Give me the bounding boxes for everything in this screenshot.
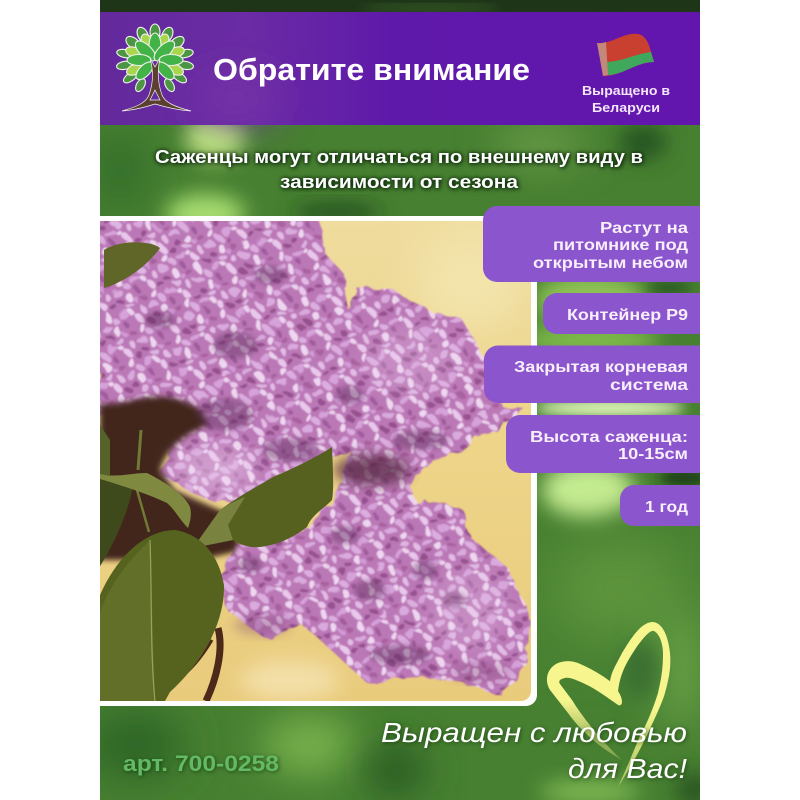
pill: closed roots: [484, 346, 700, 403]
label: grown in Belarus: Беларуси: [592, 100, 660, 115]
notice text: зависимости от сезона: [280, 172, 519, 192]
title: Обратите внимание: [213, 52, 530, 87]
label: grown in Belarus: [582, 83, 670, 115]
label: grown in Belarus: Выращено в: [582, 83, 670, 98]
pill: closed roots: Закрытая корневая: [514, 359, 688, 376]
pill: height: [506, 415, 700, 473]
notice text: Саженцы могут отличаться по внешнему виду в: [155, 147, 643, 167]
leaf: centre pointed: [193, 447, 333, 548]
pill: closed roots: система: [610, 377, 688, 394]
article number: арт. 700-0258: [123, 751, 279, 776]
pill: age: 1 год: [645, 499, 688, 516]
leaf: dark left: [100, 478, 133, 566]
cluster shading: [144, 266, 467, 665]
slogan: [381, 717, 687, 784]
leaf: vertical sliver left: [100, 425, 110, 475]
leaf: small centre-left: [100, 473, 191, 528]
dark centre behind flowers: [100, 397, 245, 560]
pill: height: 10-15см: [618, 446, 688, 463]
slogan: Выращен с любовью: [381, 717, 687, 748]
pill: container: [543, 293, 700, 334]
photo: lilac: [92, 215, 531, 701]
icon: Belarus flag: [597, 34, 654, 76]
pill: open air: питомнике под: [553, 237, 688, 254]
pill: height: Высота саженца:: [530, 429, 688, 446]
header band: [100, 12, 700, 125]
notice text: [155, 147, 643, 192]
stems: [137, 430, 220, 701]
leaf: large bottom: [100, 530, 224, 701]
slogan: для Вас!: [568, 753, 687, 784]
green blurred background: [100, 125, 700, 800]
outer leaves: [116, 24, 194, 93]
trunk and roots: [122, 58, 191, 111]
leaf: top left: [104, 242, 160, 288]
inner leaves: [124, 32, 186, 83]
info pills: [483, 206, 700, 526]
pill: age: [620, 485, 700, 526]
pill: container: Контейнер Р9: [567, 307, 688, 324]
heart right stroke: [610, 622, 670, 787]
logo: tree: [116, 24, 194, 111]
lilac clusters: [92, 215, 530, 697]
pill: open air: [483, 206, 700, 282]
photo frame: [100, 216, 537, 706]
icon: yellow heart: [547, 622, 670, 787]
heart left stroke: [547, 661, 622, 760]
pill: open air: Растут на: [600, 220, 688, 237]
top dark strip: [100, 0, 700, 12]
pill: open air: открытым небом: [533, 255, 688, 272]
